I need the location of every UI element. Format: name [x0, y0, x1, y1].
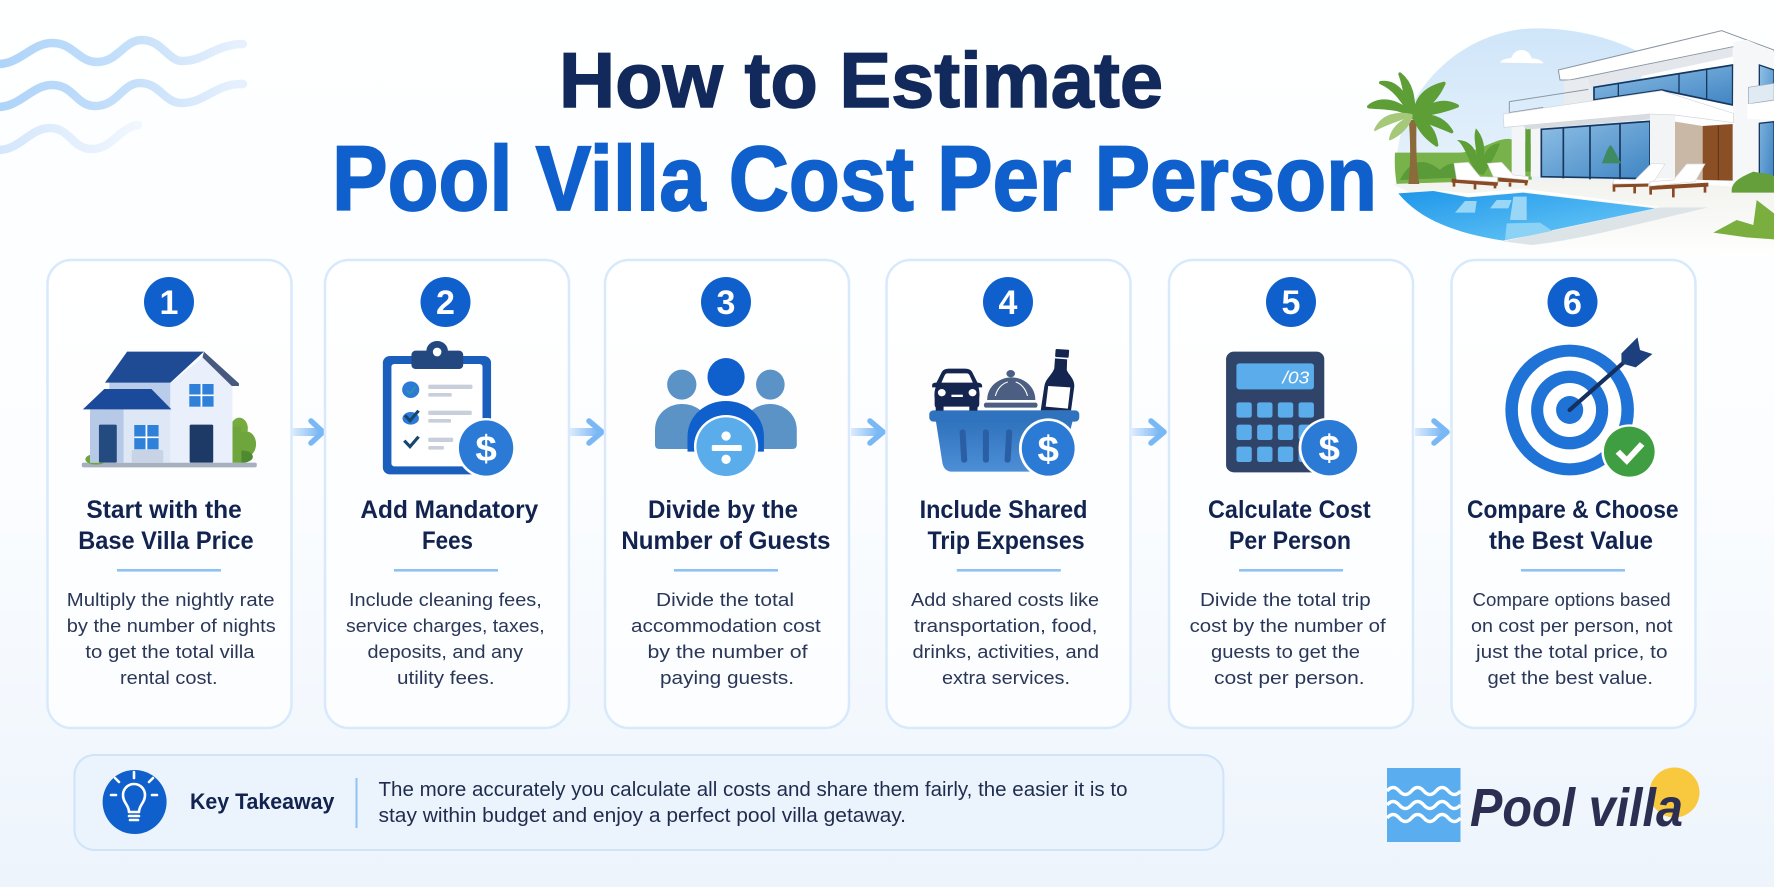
- heading: Add Mandatory: [360, 496, 538, 524]
- heading: Base Villa Price: [78, 527, 254, 555]
- arrow 4 to 5: [1132, 421, 1164, 443]
- icon: light bulb: [103, 770, 167, 834]
- description: Compare options based: [1472, 589, 1671, 610]
- description: by the number of: [648, 641, 808, 662]
- description: get the best value.: [1488, 667, 1653, 688]
- description: [631, 589, 822, 688]
- icon: calculator with dollar: /03: [1280, 367, 1310, 387]
- heading: Number of Guests: [621, 527, 830, 555]
- description: Divide the total: [656, 589, 794, 610]
- description: Include cleaning fees,: [349, 589, 542, 610]
- step number 3: [701, 277, 751, 327]
- heading: Calculate Cost: [1208, 496, 1371, 524]
- panel: step 3: [605, 260, 849, 728]
- heading: Per Person: [1229, 527, 1351, 555]
- heading: Fees: [422, 527, 473, 555]
- step number 6: [1548, 277, 1598, 327]
- step number 3: 3: [717, 284, 735, 322]
- logo: pool villa: [1387, 768, 1700, 842]
- arrow 1 to 2: [292, 421, 323, 443]
- decorative waves top-left: [0, 40, 243, 150]
- title: How to Estimate: [559, 36, 1163, 124]
- description: [1190, 589, 1387, 688]
- description: Multiply the nightly rate: [67, 589, 275, 610]
- heading: [920, 496, 1088, 555]
- panel: step 4: [886, 260, 1130, 728]
- icon: clipboard with dollar: [383, 341, 516, 478]
- illustration: pool villa: [1369, 28, 1774, 257]
- heading: [1208, 496, 1371, 555]
- arrow 5 to 6: [1415, 421, 1447, 443]
- key takeaway text: The more accurately you calculate all costs and share them fairly, the easier it is to: [378, 779, 1128, 801]
- heading: Compare & Choose: [1467, 496, 1679, 524]
- heading: Start with the: [86, 496, 242, 524]
- description: just the total price, to: [1475, 641, 1668, 662]
- icon: clipboard with dollar: $: [475, 428, 497, 469]
- step number 2: 2: [436, 284, 455, 322]
- heading: Divide by the: [648, 496, 798, 524]
- step number 1: 1: [160, 284, 178, 322]
- heading: [78, 496, 254, 555]
- step number 4: 4: [999, 284, 1018, 322]
- key takeaway text: stay within budget and enjoy a perfect pool villa getaway.: [378, 805, 906, 827]
- callout: key takeaway: [74, 755, 1224, 850]
- icon: basket of shared expenses: [929, 349, 1079, 478]
- heading: [360, 496, 538, 555]
- arrow 3 to 4: [851, 421, 883, 443]
- icon: calculator with dollar: [1226, 352, 1360, 478]
- description: [346, 589, 545, 688]
- description: rental cost.: [120, 667, 218, 688]
- description: Divide the total trip: [1200, 589, 1371, 610]
- description: [911, 589, 1099, 688]
- key takeaway label: Key Takeaway: [190, 789, 335, 814]
- step number 6: 6: [1563, 284, 1582, 322]
- title: Pool Villa Cost Per Person: [332, 128, 1377, 230]
- description: extra services.: [942, 667, 1070, 688]
- description: service charges, taxes,: [346, 615, 545, 636]
- heading: [621, 496, 830, 555]
- step number 1: [144, 277, 194, 327]
- heading: [1467, 496, 1679, 555]
- description: cost per person.: [1214, 667, 1365, 688]
- description: to get the total villa: [85, 641, 255, 662]
- step number 2: [420, 277, 470, 327]
- title: [332, 36, 1377, 230]
- description: transportation, food,: [914, 615, 1098, 636]
- heading: Trip Expenses: [928, 527, 1085, 555]
- key takeaway text: [378, 779, 1128, 827]
- panel: step 1: [48, 260, 292, 728]
- heading: Include Shared: [920, 496, 1088, 524]
- description: [67, 589, 276, 688]
- icon: calculator with dollar: $: [1319, 428, 1340, 468]
- icon: house: [82, 352, 257, 467]
- icon: target with arrow and check: [1505, 337, 1657, 479]
- description: by the number of nights: [67, 615, 276, 636]
- icon: basket of shared expenses: $: [1037, 429, 1059, 469]
- description: paying guests.: [660, 667, 794, 688]
- step number 4: [983, 277, 1033, 327]
- description: drinks, activities, and: [912, 641, 1099, 662]
- icon: group divided: [655, 358, 797, 478]
- panel: step 6: [1452, 260, 1696, 728]
- panel: step 5: [1169, 260, 1413, 728]
- step number 5: [1266, 277, 1316, 327]
- description: utility fees.: [397, 667, 495, 688]
- description: Add shared costs like: [911, 589, 1099, 610]
- arrow 2 to 3: [570, 421, 602, 443]
- description: accommodation cost: [631, 615, 822, 636]
- description: on cost per person, not: [1471, 615, 1673, 636]
- step number 5: 5: [1282, 284, 1300, 322]
- logo: pool villa: Pool villa: [1470, 778, 1683, 838]
- heading: the Best Value: [1489, 527, 1653, 555]
- description: guests to get the: [1211, 641, 1360, 662]
- description: deposits, and any: [368, 641, 524, 662]
- description: [1471, 589, 1673, 688]
- description: cost by the number of: [1190, 615, 1387, 636]
- panel: step 2: [325, 260, 569, 728]
